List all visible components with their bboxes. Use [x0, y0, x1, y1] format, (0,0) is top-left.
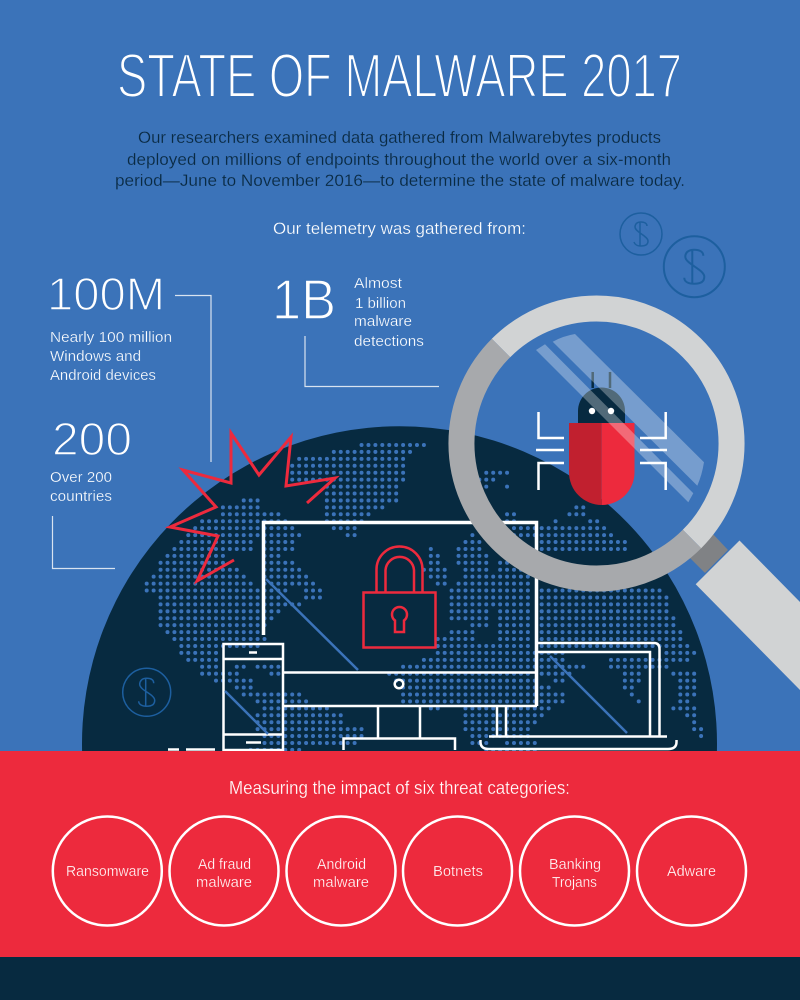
threat: Ransomware: Ransomware: [66, 863, 149, 880]
device: phone: [223, 644, 283, 750]
panel heading: Measuring the impact of six threat categories:: [229, 778, 570, 798]
stat: 1B: detections: [354, 333, 424, 350]
magnifying glass handle: [689, 533, 800, 690]
device: desktop monitor: [264, 522, 537, 750]
red starburst: [170, 433, 335, 581]
intro paragraph: period—June to November 2016—to determine the state of malware today.: [115, 171, 685, 190]
telemetry heading: Our telemetry was gathered from:: [273, 219, 526, 238]
threat: Banking Trojans: [520, 816, 629, 926]
stat: 100M: 100M: [47, 268, 165, 320]
threat: Botnets: Botnets: [433, 863, 483, 880]
stat: 1B: 1B: [272, 268, 336, 332]
leader lines: [52, 296, 439, 568]
stat: 100M: Android devices: [50, 367, 156, 384]
threat: Android malware: Android: [317, 856, 366, 873]
threat: Ad fraud malware: Ad fraud: [198, 856, 251, 873]
footer band: [0, 957, 800, 1000]
icon: bug: [536, 372, 667, 505]
threat: Adware: Adware: [667, 863, 716, 880]
icon: small dollar coin: [620, 213, 662, 255]
icon: padlock: [364, 546, 436, 648]
intro paragraph: deployed on millions of endpoints throughout the world over a six-month: [127, 150, 671, 169]
threat: Ad fraud malware: malware: [196, 874, 252, 891]
stat: 1B: 1 billion: [355, 295, 406, 312]
globe: [82, 426, 717, 755]
icon: large dollar coin: [664, 236, 725, 297]
stat: 1B: malware: [354, 313, 412, 330]
stat: 1B: Almost: [354, 275, 403, 292]
stat: 200: Over 200: [50, 469, 112, 486]
stat: 200: countries: [50, 488, 112, 505]
stat: 200: 200: [52, 413, 132, 465]
threat: Banking Trojans: Trojans: [552, 874, 597, 891]
stat: 200: [50, 413, 132, 505]
intro paragraph: Our researchers examined data gathered from Malwarebytes products: [138, 128, 661, 147]
threat: Ransomware: [53, 816, 162, 926]
stat: 1B: [272, 268, 424, 350]
stat: 100M: Windows and: [50, 348, 141, 365]
stat: 100M: [47, 268, 172, 384]
device: laptop: [480, 643, 676, 749]
threat: Android malware: malware: [313, 874, 369, 891]
threat: Android malware: [286, 816, 396, 926]
world map dots: [147, 445, 702, 750]
threat: Banking Trojans: Banking: [549, 856, 601, 873]
red panel: [0, 751, 800, 957]
threat: Adware: [637, 816, 746, 926]
small white bits above the panel: [168, 748, 215, 751]
threat: Ad fraud malware: [170, 816, 278, 926]
intro paragraph: [115, 128, 685, 190]
threat: Botnets: [403, 816, 512, 926]
magnifying glass ring: [461, 308, 732, 579]
icon: dollar coin on globe: [123, 668, 171, 716]
lens highlight: [536, 334, 704, 502]
stat: 100M: Nearly 100 million: [50, 329, 172, 346]
